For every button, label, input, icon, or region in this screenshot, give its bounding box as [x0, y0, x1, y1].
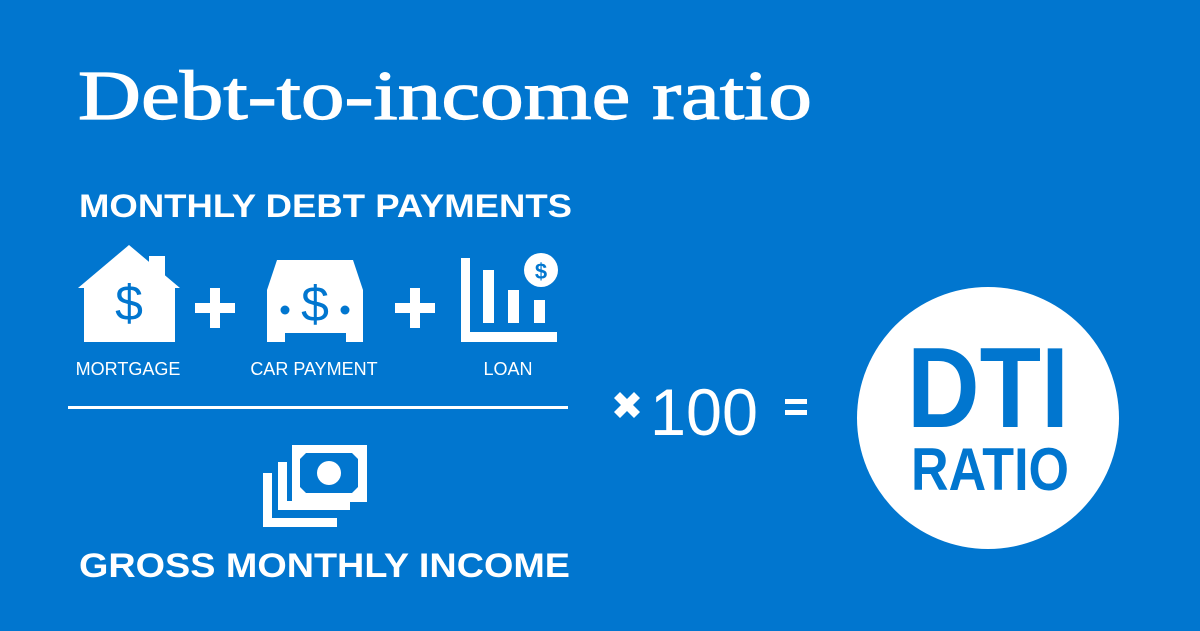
icon: house mortgage — [78, 245, 180, 342]
label: car payment: CAR PAYMENT — [250, 359, 378, 379]
label: mortgage: MORTGAGE — [76, 359, 180, 379]
icon: car payment: $ — [301, 276, 329, 332]
result circle: DTI ratio: DTI — [907, 325, 1069, 452]
heading: monthly debt payments: MONTHLY DEBT PAYMENTS — [79, 188, 572, 224]
result circle: DTI ratio: RATIO — [911, 436, 1069, 503]
icon: house mortgage: $ — [115, 275, 143, 331]
heading: gross monthly income: GROSS MONTHLY INCOME — [79, 547, 570, 585]
icon: loan chart: $ — [535, 259, 547, 284]
fraction line — [68, 406, 568, 409]
icon: car payment — [267, 260, 363, 342]
icon: plus 2 — [395, 288, 435, 328]
label: loan: LOAN — [483, 359, 533, 379]
result circle: DTI ratio — [857, 287, 1119, 549]
title: Debt-to-income ratio — [78, 58, 812, 135]
times 100 equals: 100 — [650, 375, 758, 449]
icon: money stack — [263, 445, 367, 527]
icon: plus 1 — [195, 288, 235, 328]
icon: loan chart — [461, 253, 558, 342]
times 100 equals — [614, 375, 807, 449]
